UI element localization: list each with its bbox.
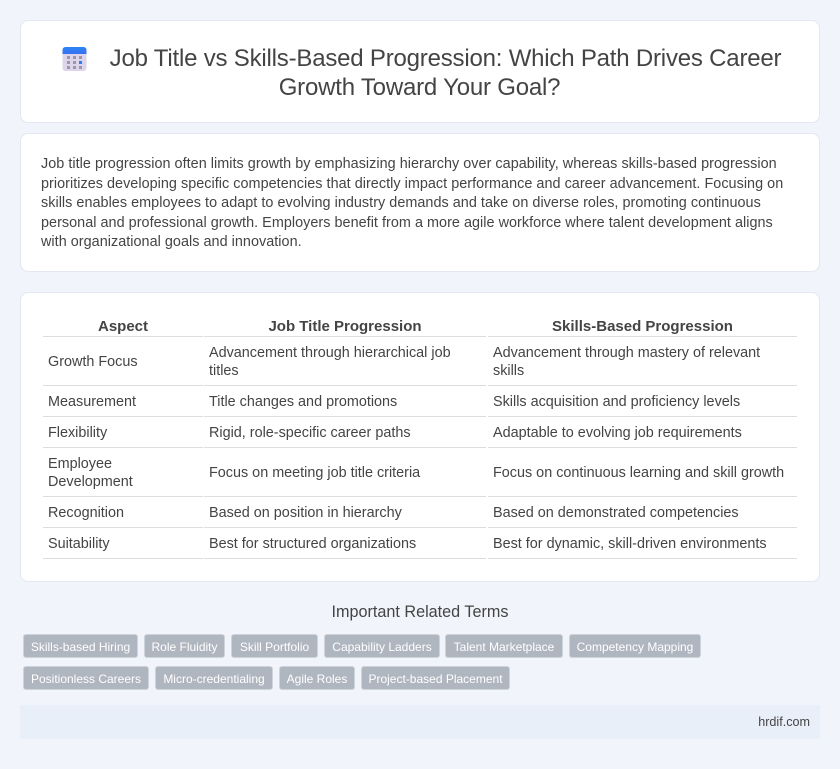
row: Employee Development: Employee: [48, 456, 112, 472]
cell: Focus on meeting job title criteria: [209, 465, 420, 481]
cell: Rigid, role-specific career paths: [209, 425, 411, 441]
intro paragraph: [41, 156, 783, 250]
tag: [324, 634, 440, 658]
cell: [209, 345, 451, 379]
intro paragraph: with organizational goals and innovation.: [41, 234, 302, 250]
row: Employee Development: Development: [48, 474, 133, 490]
tag: [23, 634, 138, 658]
tag: Positionless Careers: [31, 672, 141, 686]
row: Growth Focus: Growth Focus: [48, 354, 138, 370]
cell: Title changes and promotions: [209, 394, 397, 410]
tag: [155, 666, 273, 690]
cell: Based on position in hierarchy: [209, 505, 402, 521]
row: Flexibility: Flexibility: [48, 425, 107, 441]
tag: Skill Portfolio: [240, 640, 309, 654]
cell: Adaptable to evolving job requirements: [493, 425, 742, 441]
cell: Skills acquisition and proficiency levels: [493, 394, 740, 410]
tag: Capability Ladders: [332, 640, 432, 654]
title: Growth Toward Your Goal?: [279, 74, 560, 101]
tag: [569, 634, 701, 658]
table header: Job Title Progression: [204, 317, 486, 337]
row: Employee Development: [48, 456, 133, 490]
tag: [231, 634, 318, 658]
cell: [493, 345, 760, 379]
cell: titles: [209, 363, 239, 379]
intro paragraph: skills enables employees to adapt to evolving industry demands and take on diverse roles, promoting continuous: [41, 195, 761, 211]
table header: Aspect: Aspect: [98, 318, 148, 335]
panel: intro text card: [20, 133, 820, 272]
tag: Micro-credentialing: [163, 672, 265, 686]
tag: [279, 666, 355, 690]
tag: Skills-based Hiring: [31, 640, 130, 654]
intro paragraph: prioritizes developing specific competencies that directly impact performance and career advancement. Focusing on: [41, 176, 783, 192]
title: Job Title vs Skills-Based Progression: Which Path Drives Career: [110, 45, 781, 72]
tag: [361, 666, 510, 690]
cell: Best for structured organizations: [209, 536, 416, 552]
row: Measurement: Measurement: [48, 394, 136, 410]
row: Recognition: Recognition: [48, 505, 124, 521]
tag: [445, 634, 563, 658]
intro paragraph: Job title progression often limits growth by emphasizing hierarchy over capability, whereas skills-based progression: [41, 156, 777, 172]
table header: Aspect: [43, 317, 203, 337]
cell: skills: [493, 363, 524, 379]
intro paragraph: personal and professional growth. Employers benefit from a more agile workforce where talent development aligns: [41, 215, 773, 231]
panel: title card: [20, 20, 820, 123]
table header: Skills-Based Progression: [488, 317, 797, 337]
table header: Skills-Based Progression: Skills-Based Progression: [552, 318, 733, 335]
footer bar: [20, 705, 820, 739]
panel: comparison table card: [20, 292, 820, 582]
comparison table: [43, 318, 797, 559]
tag: Agile Roles: [287, 672, 347, 686]
tag: [144, 634, 225, 658]
tags: related terms: [23, 634, 701, 690]
tag: Project-based Placement: [368, 672, 503, 686]
tag: [23, 666, 149, 690]
cell: Based on demonstrated competencies: [493, 505, 739, 521]
footer source text: hrdif.com: [758, 715, 810, 729]
tag: Role Fluidity: [151, 640, 218, 654]
heading: Important Related Terms: Important Related Terms: [332, 603, 508, 621]
tag: Competency Mapping: [577, 640, 693, 654]
cell: Advancement through mastery of relevant: [493, 345, 760, 361]
cell: Best for dynamic, skill-driven environments: [493, 536, 767, 552]
table header: Job Title Progression: Job Title Progression: [268, 318, 422, 335]
cell: Advancement through hierarchical job: [209, 345, 451, 361]
cell: Focus on continuous learning and skill growth: [493, 465, 784, 481]
tag: Talent Marketplace: [454, 640, 554, 654]
icon: calendar: [62, 47, 86, 71]
title: [110, 45, 782, 101]
row: Suitability: Suitability: [48, 536, 110, 552]
